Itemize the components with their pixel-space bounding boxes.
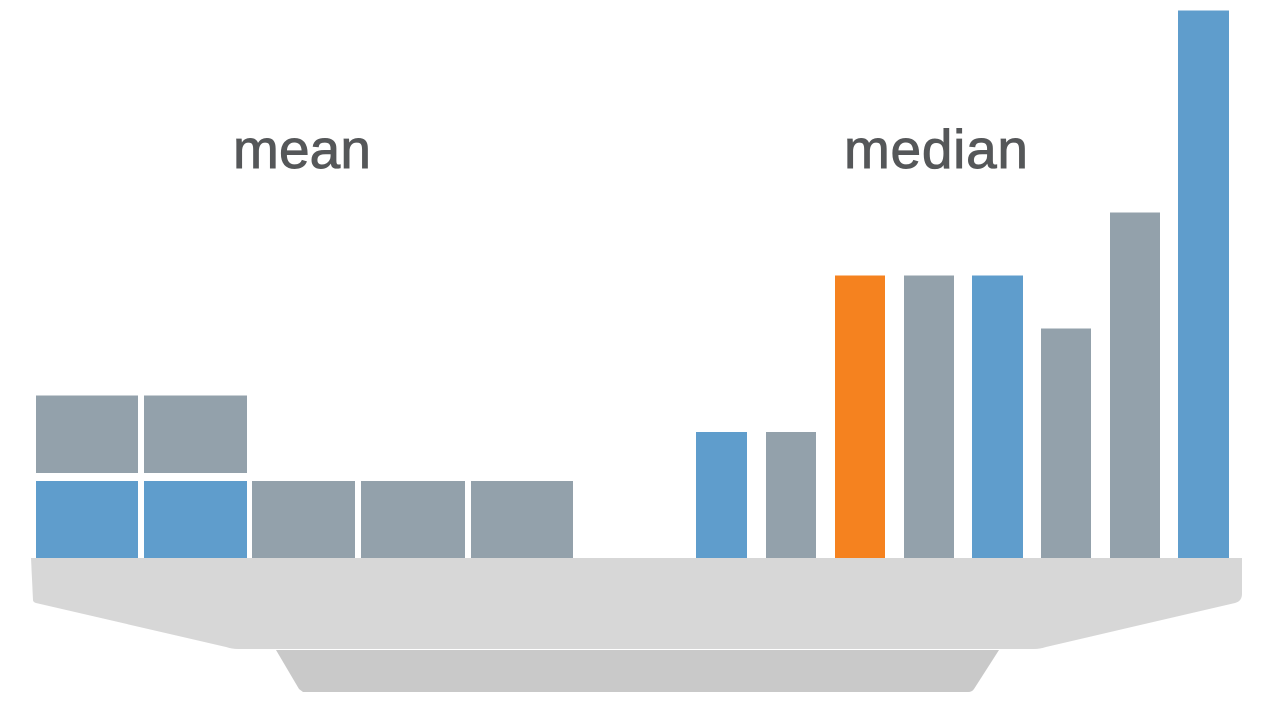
bar 7 gray — [1110, 212, 1160, 558]
block: bottom row blue 2 — [144, 481, 247, 558]
heading: mean: mean — [233, 118, 371, 180]
bar 8 blue — [1178, 10, 1229, 558]
bar 3 orange median — [835, 276, 885, 558]
bar 4 gray — [904, 276, 954, 558]
bar 2 gray — [766, 432, 816, 558]
block: top row 2 — [144, 396, 247, 473]
block: top row 1 — [36, 396, 138, 473]
block: bottom row gray 3 — [252, 481, 355, 558]
balance platform — [31, 558, 1242, 649]
heading: median: median — [844, 118, 1028, 180]
block: bottom row gray 4 — [361, 481, 465, 558]
block: bottom row gray 5 — [471, 481, 573, 558]
block stack: mean — [36, 396, 573, 558]
bar 5 blue — [972, 276, 1023, 558]
block: bottom row blue 1 — [36, 481, 138, 558]
bar 6 gray — [1041, 328, 1091, 558]
balance base — [276, 650, 999, 692]
bar chart: median — [696, 10, 1229, 558]
bar 1 blue — [696, 432, 747, 558]
